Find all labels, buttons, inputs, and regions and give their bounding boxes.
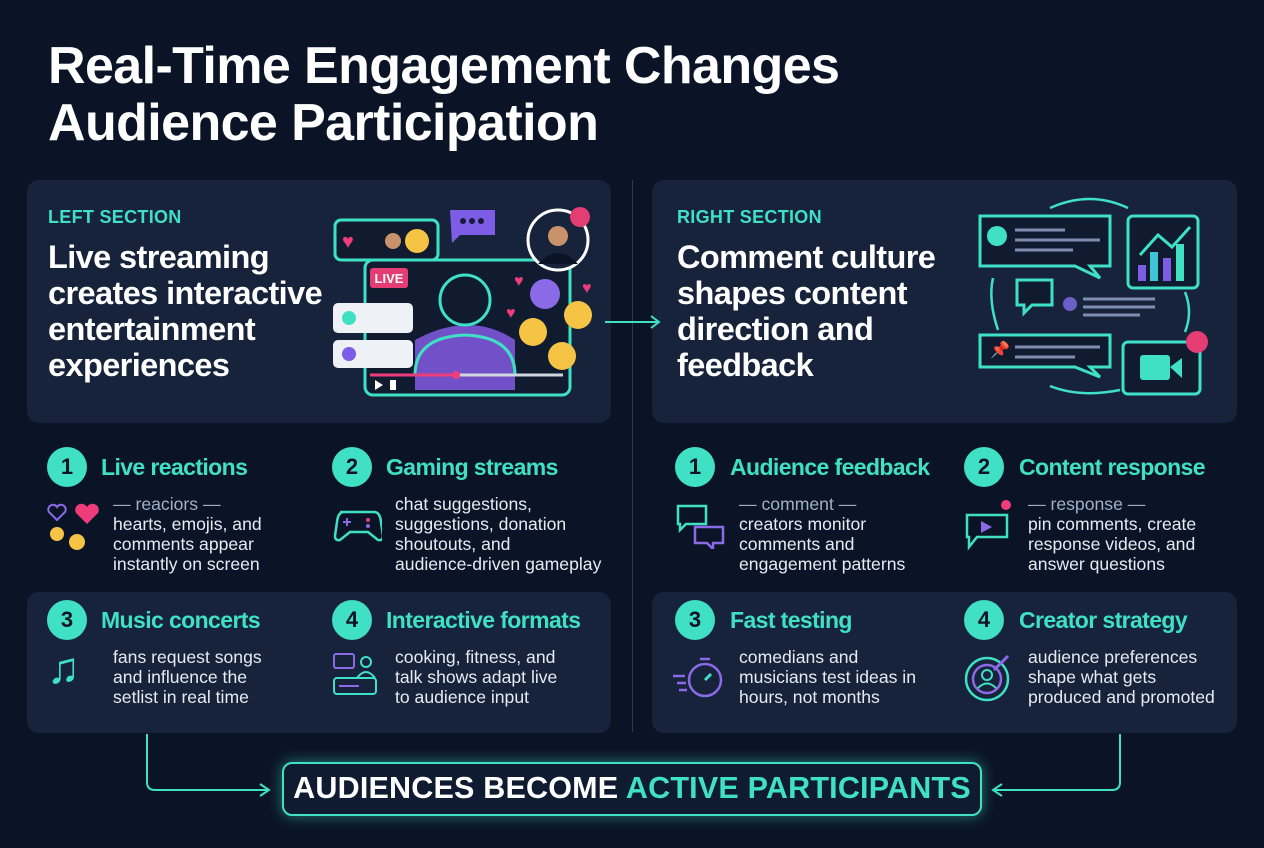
panel: right top xyxy=(652,180,1237,423)
item R4: Creator strategy xyxy=(1019,607,1187,633)
item L2 xyxy=(332,447,602,574)
item L4: talk shows adapt live xyxy=(395,667,557,687)
right heading: feedback xyxy=(677,347,813,383)
item L4: to audience input xyxy=(395,687,529,707)
item L1: instantly on screen xyxy=(113,554,260,574)
left heading: Live streaming xyxy=(48,239,269,275)
arrow: left to right xyxy=(605,315,660,329)
item R2: pin comments, create xyxy=(1028,514,1196,534)
illustration: live stream: ♥ xyxy=(582,280,592,297)
item L4: cooking, fitness, and xyxy=(395,647,555,667)
item R2: response videos, and xyxy=(1028,534,1195,554)
item R1 xyxy=(675,447,930,574)
item L3: Music concerts xyxy=(101,607,260,633)
icon: talk show xyxy=(333,653,377,695)
title: Audience Participation xyxy=(48,94,598,152)
item R1: creators monitor xyxy=(739,514,866,534)
divider xyxy=(632,180,633,732)
item R3: musicians test ideas in xyxy=(739,667,916,687)
item R4 xyxy=(964,600,1215,707)
banner xyxy=(282,762,982,816)
item L2: shoutouts, and xyxy=(395,534,510,554)
item L1: — reaciors — xyxy=(113,494,221,514)
icon: hearts emojis xyxy=(47,504,99,550)
item L2: chat suggestions, xyxy=(395,494,532,514)
panel: left top xyxy=(27,180,611,423)
item L4: Interactive formats xyxy=(386,607,580,633)
item R4: shape what gets xyxy=(1028,667,1156,687)
item R1: comments and xyxy=(739,534,854,554)
panel: right bottom xyxy=(652,592,1237,733)
item R3: 3 xyxy=(689,607,701,632)
item R4: audience preferences xyxy=(1028,647,1197,667)
item R1: — comment — xyxy=(739,494,856,514)
item L2: audience-driven gameplay xyxy=(395,554,601,574)
icon: video pin xyxy=(966,500,1011,550)
icon: music: ♫ xyxy=(47,644,80,693)
item L3: and influence the xyxy=(113,667,247,687)
panel: left bottom xyxy=(27,592,611,733)
item L3: 3 xyxy=(61,607,73,632)
icon: stopwatch xyxy=(673,658,722,698)
item R2 xyxy=(964,447,1205,574)
illustration: comment cycle: 📌 xyxy=(990,340,1010,359)
item R1: Audience feedback xyxy=(730,454,929,480)
icon: target person xyxy=(964,655,1010,702)
item L2: suggestions, donation xyxy=(395,514,566,534)
item R2: — response — xyxy=(1028,494,1145,514)
item R2: answer questions xyxy=(1028,554,1165,574)
illustration: live stream: ♥ xyxy=(506,305,516,322)
item R4: 4 xyxy=(978,607,990,632)
item R1: 1 xyxy=(689,454,701,479)
item L2: 2 xyxy=(346,454,358,479)
item R3: Fast testing xyxy=(730,607,852,633)
item R2: 2 xyxy=(978,454,990,479)
title xyxy=(48,37,839,152)
item L2: Gaming streams xyxy=(386,454,558,480)
banner: AUDIENCES BECOME ACTIVE PARTICIPANTS xyxy=(293,771,971,805)
illustration: comment cycle xyxy=(978,198,1208,396)
item L1: Live reactions xyxy=(101,454,247,480)
item R3: comedians and xyxy=(739,647,858,667)
illustration: live stream: LIVE xyxy=(375,271,404,286)
left section label: LEFT SECTION xyxy=(48,207,182,227)
icon: chat bubbles xyxy=(676,504,724,549)
right heading xyxy=(677,239,935,383)
left heading xyxy=(48,239,322,383)
item L4: 4 xyxy=(346,607,358,632)
item L4 xyxy=(332,600,580,707)
left heading: entertainment xyxy=(48,311,255,347)
item L1: comments appear xyxy=(113,534,254,554)
illustration: live stream: ♥ xyxy=(342,231,354,253)
illustration: live stream: ♥ xyxy=(514,273,524,290)
item L1: 1 xyxy=(61,454,73,479)
item L3 xyxy=(47,600,262,707)
left heading: creates interactive xyxy=(48,275,322,311)
item R2: Content response xyxy=(1019,454,1205,480)
item R3 xyxy=(673,600,916,707)
icon: gamepad xyxy=(334,510,382,542)
left heading: experiences xyxy=(48,347,229,383)
right section label: RIGHT SECTION xyxy=(677,207,822,227)
item L1: hearts, emojis, and xyxy=(113,514,262,534)
connector arrows to banner xyxy=(146,734,1121,797)
right heading: shapes content xyxy=(677,275,907,311)
title: Real-Time Engagement Changes xyxy=(48,37,839,95)
item L1 xyxy=(47,447,262,574)
illustration: live stream xyxy=(333,207,592,396)
item L3: setlist in real time xyxy=(113,687,249,707)
item R4: produced and promoted xyxy=(1028,687,1215,707)
item R3: hours, not months xyxy=(739,687,880,707)
item R1: engagement patterns xyxy=(739,554,905,574)
right heading: Comment culture xyxy=(677,239,935,275)
item L3: fans request songs xyxy=(113,647,262,667)
right heading: direction and xyxy=(677,311,873,347)
